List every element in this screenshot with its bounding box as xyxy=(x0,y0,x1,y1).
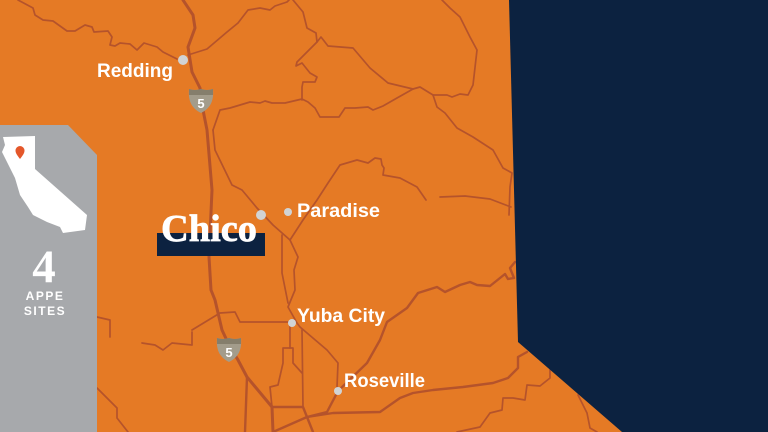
label bar xyxy=(157,233,265,256)
interstate 5 xyxy=(183,0,273,432)
shield: interstate 5 north xyxy=(189,89,213,113)
navy neighbouring region xyxy=(509,0,768,432)
city: Redding: Redding xyxy=(97,61,173,82)
site label: SITES xyxy=(24,304,66,318)
shield: interstate 5 north: 5 xyxy=(197,96,205,111)
site label xyxy=(24,289,66,318)
city: Chico highlight: Chico xyxy=(161,208,257,250)
icon: California silhouette xyxy=(2,136,87,233)
side panel: California locator xyxy=(0,125,97,432)
shield: interstate 5 south xyxy=(217,338,241,362)
road network xyxy=(18,0,597,432)
icon: location pin xyxy=(16,146,24,159)
city: Redding xyxy=(97,55,188,82)
site label: APPE xyxy=(26,289,64,303)
site count: 4 xyxy=(32,241,56,293)
shield: interstate 5 south: 5 xyxy=(225,345,233,360)
city: Paradise: Paradise xyxy=(297,201,380,222)
panel background xyxy=(0,125,97,432)
city: Roseville: Roseville xyxy=(344,371,425,392)
major roads xyxy=(245,262,527,432)
minor roads xyxy=(18,0,597,432)
city: Yuba City: Yuba City xyxy=(297,306,385,327)
